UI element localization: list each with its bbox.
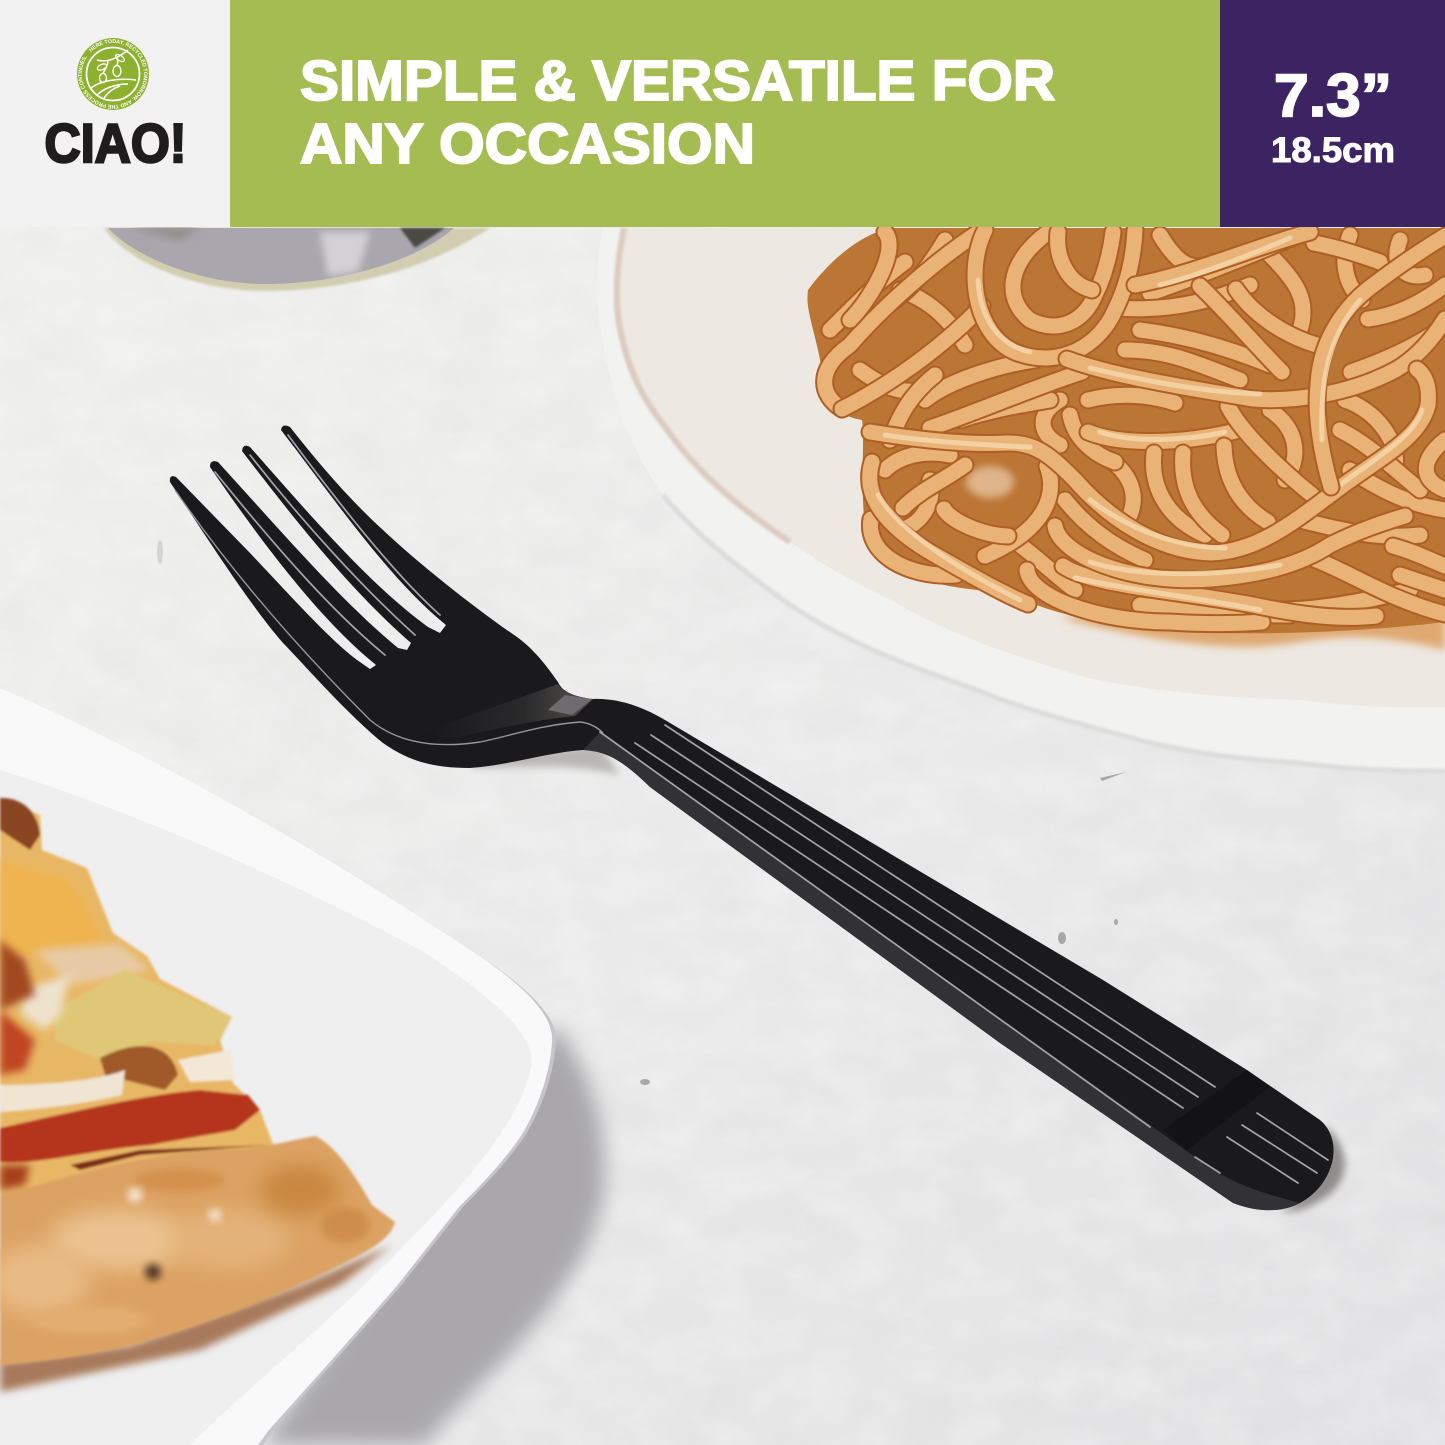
brand wordmark: CIAO! — [44, 112, 186, 174]
onion strip — [0, 1070, 125, 1112]
length in inches: 7.3” — [1274, 62, 1392, 129]
head highlight near neck — [420, 684, 593, 745]
tine highlights — [215, 435, 440, 655]
glass base — [104, 228, 490, 291]
tip grooves — [1195, 1113, 1328, 1183]
plate: pasta plate top right — [598, 228, 1445, 771]
rim highlights — [175, 490, 603, 745]
logo badge: HERE TODAY, RECYCLED TOMORROW. AND THE PROCESS CONTINUES. — [78, 39, 148, 109]
fork shadow — [470, 745, 1345, 1212]
heading banner — [230, 0, 1220, 227]
pasta shadow base — [807, 228, 1445, 633]
heading line 1: SIMPLE & VERSATILE FOR — [300, 49, 1055, 113]
black plastic fork — [170, 426, 1334, 1210]
plate seen through pasta — [966, 466, 1014, 498]
size panel — [1220, 0, 1445, 227]
crust reflection — [0, 1245, 392, 1392]
plate: pizza plate bottom left — [0, 688, 556, 1445]
bacon bits — [0, 798, 40, 850]
logo panel — [0, 0, 230, 227]
handle grooves — [665, 725, 1215, 1087]
handle side bevel — [583, 732, 1300, 1210]
red pepper — [0, 1090, 260, 1162]
cross band — [1163, 1070, 1270, 1150]
length in centimetres: 18.5cm — [1271, 131, 1395, 170]
heading line 2: ANY OCCASION — [300, 112, 755, 176]
pizza slice — [0, 798, 395, 1392]
fork body — [170, 426, 1334, 1210]
pasta pile — [807, 228, 1445, 650]
crust — [0, 1136, 395, 1365]
plate shadow on table — [262, 1025, 605, 1445]
background strands — [860, 235, 1445, 615]
cheese topping — [0, 798, 300, 1230]
sauce smear on plate — [1060, 600, 1445, 650]
